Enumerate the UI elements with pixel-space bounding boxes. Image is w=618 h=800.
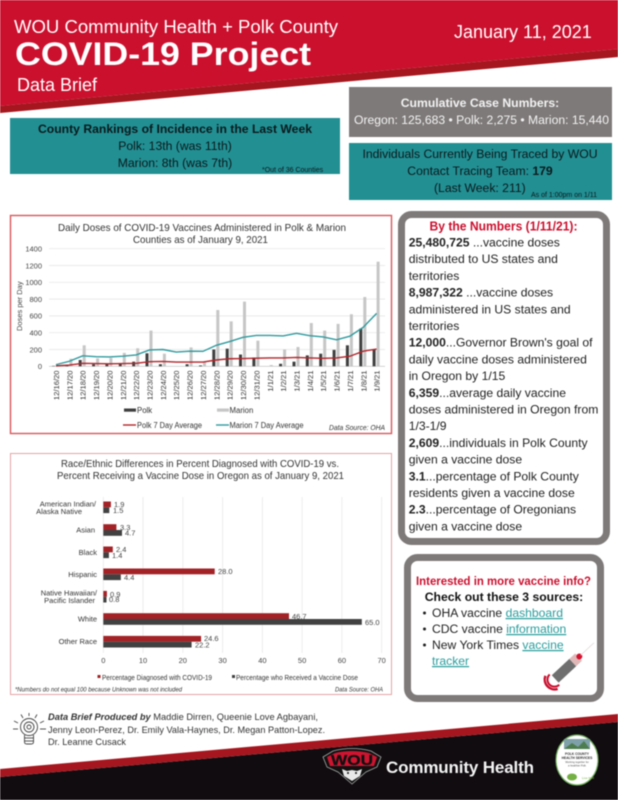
panel: contact tracing: As of 1:00pm on 1/11 — [531, 192, 597, 199]
header banner — [0, 0, 618, 113]
chart legend: Data Source: OHA — [329, 425, 385, 432]
panel: county rankings: County Rankings of Incidence in the Last Week — [38, 122, 312, 136]
date axis labels: 1/2/21 — [279, 370, 288, 392]
panel: county rankings: Polk: 13th (was 11th) — [118, 139, 232, 153]
y axis: 1000 — [25, 278, 42, 287]
date axis labels: 1/3/21 — [292, 370, 302, 392]
chart title: Percent Receiving a Vaccine Dose in Oregon as of January 9, 2021 — [57, 470, 344, 482]
chart legend: Marion — [230, 406, 253, 415]
chart title: Race/Ethnic Differences in Percent Diagnosed with COVID-19 vs. — [61, 458, 339, 470]
date axis labels: 12/26/20 — [186, 370, 195, 400]
category labels — [36, 500, 98, 646]
date axis labels: 12/17/20 — [65, 370, 74, 400]
statistics list: 6,359...average daily vaccine — [409, 386, 566, 400]
panel: by the numbers — [402, 214, 606, 542]
icon: Polk County Health Services logo: Live Well — [582, 776, 594, 780]
date axis labels: 1/4/21 — [306, 370, 315, 392]
chart footnote: *Numbers do not equal 100 because Unknown was not included — [15, 686, 182, 694]
date axis labels: 12/23/20 — [146, 370, 154, 400]
chart title: Counties as of January 9, 2021 — [133, 234, 268, 246]
category labels: Alaska Native — [36, 507, 82, 516]
source links: CDC vaccine information — [432, 622, 566, 636]
chart legend: Marion 7 Day Average — [230, 421, 304, 430]
x axis labels: 30 — [218, 656, 227, 665]
marion 7 day average line — [56, 313, 377, 365]
marion daily bars — [56, 262, 380, 366]
category labels: Other Race — [59, 637, 97, 646]
statistics list: 2.3...percentage of Oregonians — [409, 503, 576, 517]
credits text: Data Brief Produced by Maddie Dirren, Queenie Love Agbayani, — [48, 712, 318, 723]
footer band — [0, 714, 618, 800]
date axis labels: 12/16/20 — [52, 370, 61, 400]
credits text: Jenny Leon-Perez, Dr. Emily Vala-Haynes, Dr. Megan Patton-Lopez. — [48, 725, 325, 736]
icon: WOU logo — [323, 748, 381, 784]
date axis labels: 12/24/20 — [159, 370, 168, 400]
date axis labels: 12/19/20 — [92, 370, 101, 400]
date axis labels: 1/9/21 — [373, 370, 382, 392]
date axis labels: 1/6/21 — [333, 370, 342, 392]
bar value labels: 28.0 — [218, 567, 233, 576]
statistics list: residents given a vaccine dose — [409, 486, 575, 500]
panel: race ethnic differences chart — [10, 454, 392, 694]
icon: light bulb — [13, 713, 46, 744]
bar value labels: 4.7 — [125, 528, 135, 538]
date axis labels: 1/1/21 — [266, 370, 275, 392]
statistics list — [409, 236, 598, 533]
date: January 11, 2021 — [454, 22, 592, 42]
icon: Polk County Health Services logo: Working together for — [565, 760, 589, 764]
statistics list: 25,480,725 ...vaccine doses — [409, 236, 560, 250]
y axis: 1400 — [25, 244, 42, 254]
bar value labels: 0.9 — [110, 590, 120, 599]
date axis labels: 12/21/20 — [119, 370, 128, 400]
icon: Polk County Health Services logo: a healthier Polk — [568, 764, 587, 768]
panel: cumulative case numbers: Cumulative Case Numbers: — [401, 96, 559, 110]
statistics list: given a vaccine dose — [409, 519, 522, 533]
icon: Polk County Health Services logo: HEALTH SERVICES — [562, 756, 593, 760]
bar value labels: 65.0 — [365, 618, 380, 627]
statistics list: 8,987,322 ...vaccine doses — [409, 286, 553, 300]
source links — [423, 606, 566, 668]
panel: cumulative case numbers: Oregon: 125,683 • Polk: 2,275 • Marion: 15,440 — [354, 113, 609, 127]
y axis: 800 — [29, 295, 42, 304]
icon: syringe — [541, 636, 600, 693]
chart legend: Percentage who Received a Vaccine Dose — [236, 673, 358, 682]
date axis labels: 12/28/20 — [212, 370, 221, 400]
date axis labels: 12/20/20 — [105, 370, 114, 400]
y axis: 1200 — [25, 261, 42, 270]
percent vaccinated bars — [103, 507, 362, 648]
category labels: Hispanic — [68, 570, 97, 579]
statistics list: 12,000...Governor Brown's goal of — [409, 336, 593, 350]
gridlines — [103, 497, 382, 653]
y axis: 400 — [29, 328, 42, 338]
x axis labels: 0 — [101, 656, 105, 665]
chart legend: Polk — [137, 406, 152, 415]
chart footnote — [15, 686, 383, 694]
statistics list: daily vaccine doses administered — [409, 352, 587, 366]
date axis labels: 12/27/20 — [199, 370, 208, 400]
date axis labels — [52, 370, 382, 400]
source links: New York Times vaccine — [432, 638, 564, 652]
panel: contact tracing — [349, 143, 612, 200]
category labels: Native Hawaiian/ — [41, 588, 98, 598]
statistics list: territories — [409, 269, 459, 283]
statistics list: 1/3-1/9 — [409, 419, 447, 433]
chart legend: Polk 7 Day Average — [137, 421, 202, 430]
category labels: White — [78, 614, 97, 624]
date axis labels: 12/31/20 — [252, 370, 261, 400]
credits block — [13, 712, 325, 748]
statistics list: given a vaccine dose — [409, 453, 522, 467]
panel: contact tracing: Individuals Currently Being Traced by WOU — [362, 147, 598, 161]
chart legend — [98, 673, 358, 682]
data brief label: Data Brief — [17, 75, 98, 95]
x axis labels: 10 — [139, 656, 147, 665]
chart title — [57, 458, 344, 482]
y axis: Doses per Day — [15, 281, 24, 331]
y axis: 0 — [38, 362, 42, 371]
x axis labels: 20 — [179, 656, 187, 665]
bar value labels: 2.4 — [116, 545, 126, 554]
date axis labels: 12/18/20 — [79, 370, 88, 400]
statistics list: 3.1...percentage of Polk County — [409, 469, 580, 483]
bar value labels: 46.7 — [292, 612, 307, 621]
credits text: Dr. Leanne Cusack — [48, 737, 126, 748]
statistics list: in Oregon by 1/15 — [409, 369, 505, 383]
panel: county rankings: Marion: 8th (was 7th) — [118, 156, 232, 170]
panel heading: By the Numbers (1/11/21): — [430, 218, 578, 234]
polk daily bars — [52, 328, 376, 366]
bar value labels: 1.9 — [114, 500, 124, 509]
category labels: Asian — [76, 526, 95, 534]
panel heading: Interested in more vaccine info? — [416, 574, 591, 588]
x axis labels — [101, 656, 386, 665]
panel: county rankings — [10, 118, 340, 174]
bar value labels — [109, 500, 380, 650]
statistics list: administered in US states and — [409, 302, 571, 316]
bar value labels: 1.5 — [113, 506, 123, 515]
x axis labels: 50 — [298, 656, 306, 665]
y axis: 600 — [29, 312, 42, 321]
statistics list: distributed to US states and — [409, 252, 558, 266]
icon: Polk County Health Services logo — [556, 735, 598, 785]
statistics list: doses administered in Oregon from — [409, 402, 598, 416]
panel: county rankings: *Out of 36 Counties — [262, 167, 324, 174]
source links: OHA vaccine dashboard — [432, 606, 563, 620]
icon: WOU logo: WOU — [331, 752, 373, 769]
chart legend: Percentage Diagnosed with COVID-19 — [102, 673, 212, 682]
y axis — [15, 244, 385, 371]
date axis labels: 12/29/20 — [226, 370, 235, 400]
credits text — [48, 712, 325, 748]
panel: cumulative case numbers — [349, 87, 612, 137]
source links: tracker — [432, 654, 469, 668]
date axis labels: 1/5/21 — [319, 370, 328, 392]
x axis labels: 70 — [378, 656, 386, 665]
chart legend — [123, 406, 385, 432]
panel: contact tracing: (Last Week: 211) — [434, 181, 526, 195]
panel: more vaccine info — [408, 558, 600, 698]
header main title: COVID-19 Project — [15, 36, 311, 72]
header title line: WOU Community Health + Polk County — [14, 16, 339, 37]
bar value labels: 22.2 — [195, 640, 210, 650]
community health wordmark: Community Health — [386, 758, 534, 777]
polk 7 day average line — [56, 349, 377, 366]
panel: daily doses chart — [10, 216, 392, 434]
date axis labels: 1/8/21 — [359, 370, 368, 392]
x axis labels: 40 — [258, 656, 267, 665]
icon: Polk County Health Services logo: POLK COUNTY — [565, 752, 590, 756]
date axis labels: 12/22/20 — [132, 370, 141, 400]
percent diagnosed bars — [103, 502, 289, 642]
y axis: 200 — [29, 345, 42, 354]
bar value labels: 1.4 — [112, 551, 122, 560]
chart title: Daily Doses of COVID-19 Vaccines Administered in Polk & Marion — [58, 222, 346, 234]
date axis labels: 12/30/20 — [239, 370, 248, 400]
bar value labels: 24.6 — [204, 634, 219, 643]
category labels: American Indian/ — [40, 500, 97, 508]
panel: contact tracing: Contact Tracing Team: 179 — [407, 164, 553, 178]
category labels: Black — [79, 548, 97, 557]
bar value labels: 4.4 — [124, 573, 134, 582]
category labels: Pacific Islander — [44, 596, 95, 605]
date axis labels: 12/25/20 — [172, 370, 181, 400]
statistics list: territories — [409, 319, 459, 333]
panel subheading: Check out these 3 sources: — [425, 590, 583, 604]
x axis labels: 60 — [338, 656, 346, 665]
bar value labels: 3.3 — [120, 523, 130, 532]
chart footnote: Data Source: OHA — [335, 686, 383, 694]
chart title — [58, 222, 346, 246]
statistics list: 2,609...individuals in Polk County — [409, 436, 588, 450]
bar value labels: 0.8 — [109, 595, 119, 604]
date axis labels: 1/7/21 — [346, 370, 355, 392]
